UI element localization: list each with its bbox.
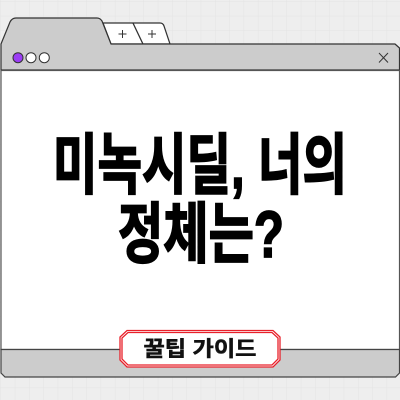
title [53, 128, 347, 271]
icon: plus [118, 30, 156, 38]
badge: tip guide: 꿀팁 가이드 [144, 338, 256, 361]
small tabs [103, 23, 170, 44]
icon: close [379, 53, 388, 62]
window top bar [1, 18, 400, 70]
window content area [1, 70, 400, 350]
window control dots [13, 53, 49, 63]
window bottom bar [1, 350, 400, 377]
title: 정체는? [118, 197, 284, 271]
badge: tip guide [120, 330, 280, 367]
